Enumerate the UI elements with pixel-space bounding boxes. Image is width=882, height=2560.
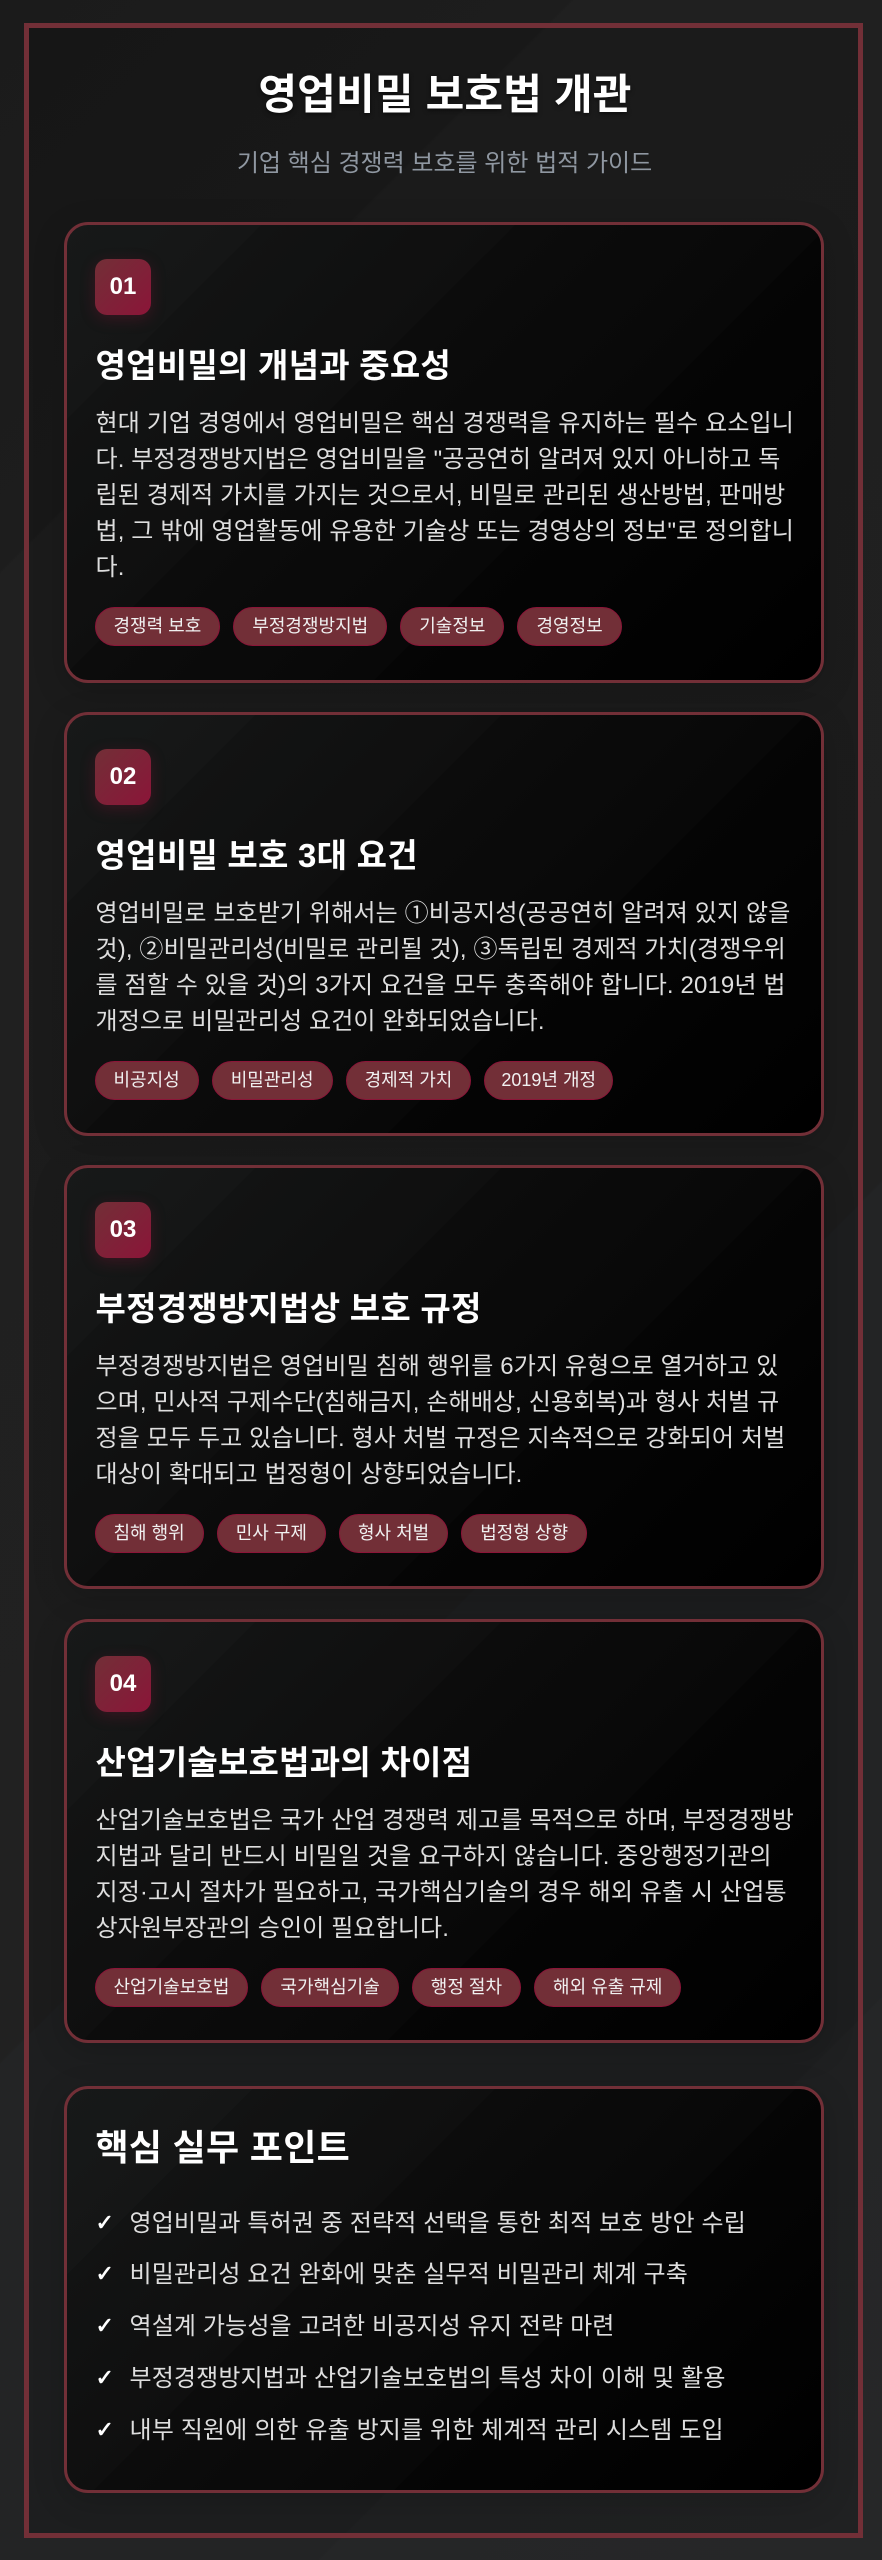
tags 01: 경영정보 [536,616,603,636]
tags 02: 비공지성 [114,1070,180,1090]
panel: section 02 [64,712,824,1136]
item 5: ✓ [96,2418,114,2443]
tags 01: 기술정보 [419,616,485,636]
text block 04: 상자원부장관의 승인이 필요합니다. [96,1915,449,1942]
heading 01: 영업비밀의 개념과 중요성 [96,347,451,384]
item 3: ✓ [96,2314,114,2339]
number badge 03: 03 [110,1216,136,1243]
text block 03: 대상이 확대되고 법정형이 상향되었습니다. [96,1461,522,1488]
text block 02: 를 점할 수 있을 것)의 3가지 요건을 모두 충족해야 합니다. 2019년 법 [96,972,786,999]
text block 03 [96,1353,785,1488]
tags 04: 해외 유출 규제 [553,1977,662,1997]
item 1: 영업비밀과 특허권 중 전략적 선택을 통한 최적 보호 방안 수립 [130,2210,746,2237]
panel: key practical points [64,2086,824,2493]
number badge 01: 01 [110,273,136,300]
text block 04: 지정·고시 절차가 필요하고, 국가핵심기술의 경우 해외 유출 시 산업통 [96,1879,787,1906]
tags 01: 부정경쟁방지법 [252,616,368,636]
tags 04 [95,1968,681,2007]
number badge 02: 02 [110,763,136,790]
item 5: 내부 직원에 의한 유출 방지를 위한 체계적 관리 시스템 도입 [130,2417,724,2444]
tags 04: 산업기술보호법 [114,1977,229,1997]
text block 04: 지법과 달리 반드시 비밀일 것을 요구하지 않습니다. 중앙행정기관의 [96,1843,772,1870]
item 4: ✓ [96,2366,114,2391]
item 1: ✓ [96,2211,114,2236]
number badge 04: 04 [110,1670,136,1697]
heading 03: 부정경쟁방지법상 보호 규정 [96,1290,482,1327]
item 2: 비밀관리성 요건 완화에 맞춘 실무적 비밀관리 체계 구축 [130,2261,688,2288]
item 4: 부정경쟁방지법과 산업기술보호법의 특성 차이 이해 및 활용 [130,2365,726,2392]
panel: section 03 [64,1165,824,1589]
number badge 02 [95,749,151,805]
number badge 03 [95,1202,151,1258]
tags 03: 법정형 상향 [480,1523,568,1543]
title: 영업비밀 보호법 개관 [258,71,632,118]
text block 02: 것), ②비밀관리성(비밀로 관리될 것), ③독립된 경제적 가치(경쟁우위 [96,936,786,963]
tags 02: 경제적 가치 [365,1070,452,1090]
text block 03: 으며, 민사적 구제수단(침해금지, 손해배상, 신용회복)과 형사 처벌 규 [96,1389,779,1416]
text block 01: 현대 기업 경영에서 영업비밀은 핵심 경쟁력을 유지하는 필수 요소입니 [96,410,794,437]
heading 02: 영업비밀 보호 3대 요건 [96,837,418,874]
tags 01: 경쟁력 보호 [114,616,201,636]
tags 03: 형사 처벌 [358,1523,429,1543]
tags 02: 비밀관리성 [231,1070,314,1090]
heading 04: 산업기술보호법과의 차이점 [96,1744,472,1781]
panel: section 04 [64,1619,824,2043]
heading: key points: 핵심 실무 포인트 [96,2127,350,2168]
text block 02: 영업비밀로 보호받기 위해서는 ①비공지성(공공연히 알려져 있지 않을 [96,900,790,927]
tags 01 [95,607,622,646]
panel: section 01 [64,222,824,683]
text block 02 [96,900,790,1035]
number badge 01 [95,259,151,315]
checklist [96,2210,746,2444]
text block 04: 산업기술보호법은 국가 산업 경쟁력 제고를 목적으로 하며, 부정경쟁방 [96,1807,794,1834]
text block 04 [96,1807,794,1942]
text block 02: 개정으로 비밀관리성 요건이 완화되었습니다. [96,1008,545,1035]
subtitle: 기업 핵심 경쟁력 보호를 위한 법적 가이드 [237,150,652,177]
text block 01: 다. 부정경쟁방지법은 영업비밀을 "공공연히 알려져 있지 아니하고 독 [96,446,780,473]
tags 02 [95,1061,613,1100]
item 3: 역설계 가능성을 고려한 비공지성 유지 전략 마련 [130,2313,614,2340]
item 2: ✓ [96,2262,114,2287]
tags 02: 2019년 개정 [501,1070,596,1090]
tags 03: 민사 구제 [236,1523,307,1543]
tags 03 [95,1514,587,1553]
text block 01: 법, 그 밖에 영업활동에 유용한 기술상 또는 경영상의 정보"로 정의합니 [96,518,794,545]
tags 03: 침해 행위 [114,1523,185,1543]
tags 04: 행정 절차 [431,1977,502,1997]
number badge 04 [95,1656,151,1712]
text block 03: 정을 모두 두고 있습니다. 형사 처벌 규정은 지속적으로 강화되어 처벌 [96,1425,785,1452]
text block 01: 다. [96,554,125,581]
text block 01: 립된 경제적 가치를 가지는 것으로서, 비밀로 관리된 생산방법, 판매방 [96,482,785,509]
tags 04: 국가핵심기술 [280,1977,380,1997]
text block 01 [96,410,794,581]
text block 03: 부정경쟁방지법은 영업비밀 침해 행위를 6가지 유형으로 열거하고 있 [96,1353,778,1380]
